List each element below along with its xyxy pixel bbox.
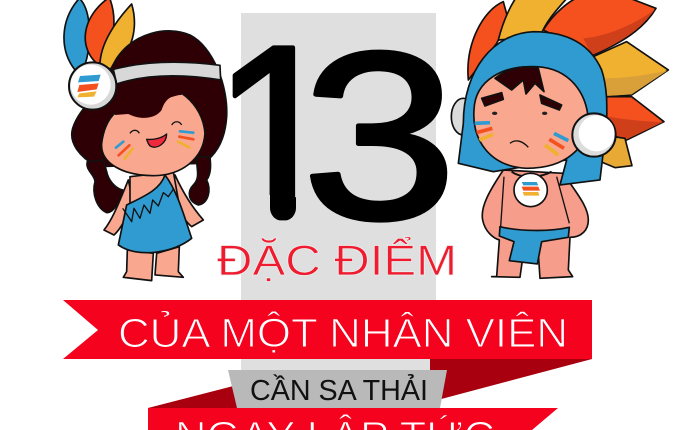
boy arms and torso [482,170,588,278]
girl character [64,0,227,281]
boy cheek stripes [475,123,568,155]
tag: can sa thai: CẦN SA THẢI [250,373,428,407]
girl chest [130,172,178,205]
tag: can sa thai [228,370,447,408]
gray background panel [241,13,436,373]
boy medallion [512,172,552,207]
number 13: 3 [302,3,457,269]
girl eyes and mouth [130,122,182,147]
girl hair and braids [72,31,227,213]
boy headdress feathers [468,0,668,168]
boy hood [458,32,607,185]
boy earring [572,113,616,157]
girl cheek stripes [116,131,193,159]
boy left ear [451,98,475,135]
number 13 [232,45,448,223]
boy hair [495,67,544,94]
heading: dac diem: ĐẶC ĐIỂM [217,236,457,285]
banner: cua mot nhan vien [63,300,592,359]
girl bangs [115,72,182,118]
boy arm lines [501,177,569,227]
girl face [102,93,205,176]
girl legs [123,247,183,281]
girl feathers [64,0,134,70]
ribbon fold [148,359,592,408]
girl dress fringe [123,188,174,222]
girl arms [104,175,203,235]
banner: cua mot nhan vien: CỦA MỘT NHÂN VIÊN [118,310,568,356]
girl dress [118,175,192,253]
girl headband [113,62,221,84]
boy loincloth [499,227,569,264]
girl badge [69,62,116,110]
boy eyes and mouth [492,112,547,147]
boy eyebrows [482,93,562,110]
boy character [451,0,668,278]
banner: ngay lap tuc [148,408,558,430]
boy face [474,67,588,168]
number 13: 1 [212,0,344,271]
